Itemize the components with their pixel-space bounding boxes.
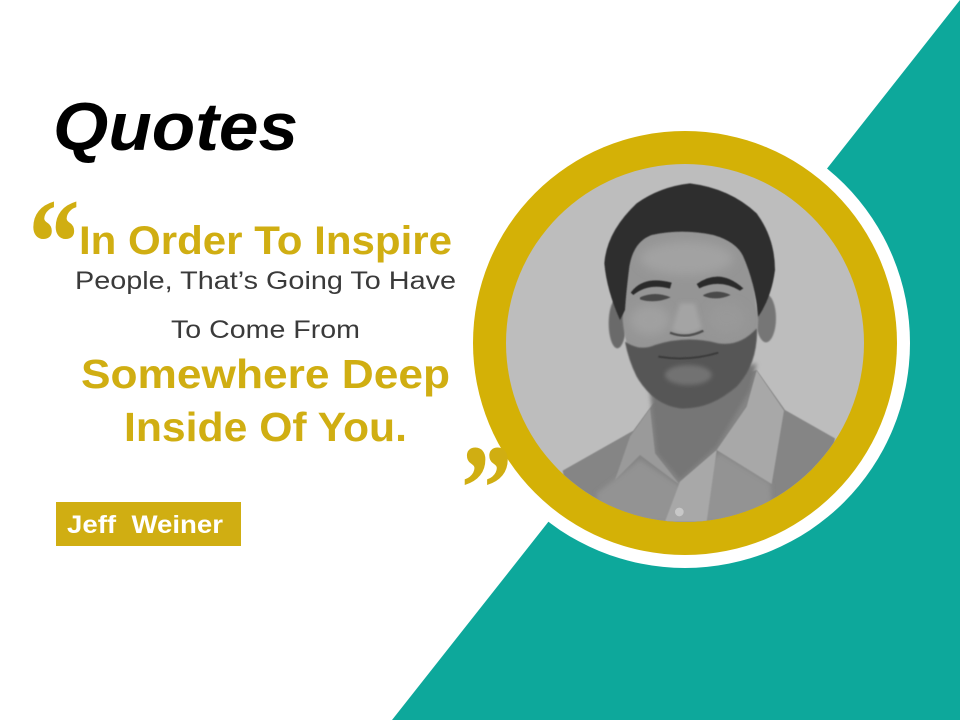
- face: [622, 231, 758, 348]
- cheek highlights: [634, 308, 666, 332]
- closing quotation mark: ”: [455, 421, 510, 558]
- title: Quotes: [53, 89, 298, 165]
- nose: [672, 303, 702, 334]
- author label: [56, 502, 241, 546]
- eyebrows: [631, 280, 672, 295]
- forehead highlight: [644, 244, 730, 274]
- quote text: Inside Of You.: [124, 404, 407, 450]
- mouth: [658, 353, 718, 358]
- hair: [604, 183, 775, 320]
- white outer ring: [460, 118, 910, 568]
- portrait badge: [460, 118, 910, 568]
- quote text: To Come From: [171, 316, 360, 344]
- shirt button: [675, 508, 684, 516]
- placket: [665, 450, 717, 522]
- shirt: [563, 370, 835, 527]
- opening quotation mark: “: [23, 175, 78, 312]
- beard: [625, 328, 757, 408]
- quote text: In Order To Inspire: [79, 219, 452, 263]
- left collar: [615, 408, 680, 485]
- right collar: [717, 371, 784, 484]
- portrait illustration: [563, 183, 835, 527]
- eyes: [640, 294, 671, 301]
- author label: Jeff Weiner: [67, 511, 223, 539]
- teal diagonal background: [392, 0, 960, 720]
- neck: [650, 363, 757, 480]
- ears: [609, 298, 626, 348]
- quote text: People, That’s Going To Have: [75, 267, 456, 295]
- quote text: [75, 219, 456, 450]
- quote text: Somewhere Deep: [81, 351, 450, 397]
- portrait backdrop: [506, 164, 864, 522]
- shirt front: [597, 453, 773, 523]
- gold ring: [473, 131, 897, 555]
- chin patch: [665, 365, 712, 385]
